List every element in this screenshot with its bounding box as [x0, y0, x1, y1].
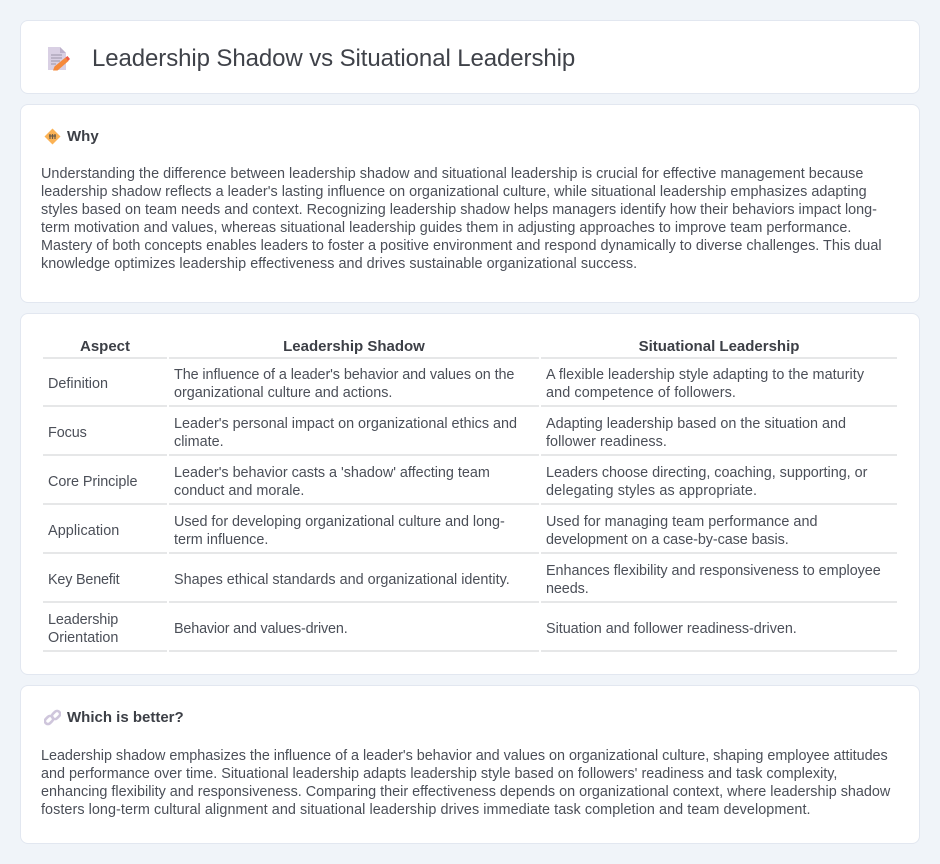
- row: core principle: conduct and morale.: [174, 483, 304, 499]
- row: focus: follower readiness.: [546, 434, 667, 450]
- row: core principle: Leader's behavior casts a 'shadow' affecting team: [174, 465, 490, 481]
- row: application: Used for developing organizational culture and long-: [174, 514, 505, 530]
- text block: which is better: fosters long-term cultural alignment and situational leadership drives immediate task completion and team development.: [41, 802, 811, 818]
- panel: which is better: [20, 685, 920, 844]
- row: leadership orientation: Leadership: [48, 612, 118, 628]
- icon: link: [44, 710, 61, 726]
- text block: which is better: and performance over time. Situational leadership adapts leadership style based on followers' readiness and task complexity,: [41, 766, 837, 782]
- row: application: Used for managing team performance and: [546, 514, 818, 530]
- row: core principle: [43, 465, 897, 505]
- row: definition: and competence of followers.: [546, 385, 736, 401]
- icon: warning diamond: [44, 128, 60, 144]
- row: leadership orientation: Situation and follower readiness-driven.: [546, 621, 797, 637]
- panel: why: [20, 104, 920, 303]
- row: application: Application: [48, 523, 119, 539]
- icon: memo with pencil: [48, 47, 70, 70]
- row: core principle: delegating styles as appropriate.: [546, 483, 757, 499]
- table header: Leadership Shadow: [283, 338, 425, 355]
- row: key benefit: Key Benefit: [48, 572, 119, 588]
- text block: why: knowledge optimizes leadership effectiveness and drives sustainable organizational success.: [41, 256, 637, 272]
- row: key benefit: [43, 563, 897, 603]
- heading: which is better: Which is better?: [67, 709, 184, 726]
- row: core principle: Core Principle: [48, 474, 137, 490]
- row: application: development on a case-by-case basis.: [546, 532, 789, 548]
- row: focus: Focus: [48, 425, 87, 441]
- row: focus: climate.: [174, 434, 224, 450]
- row: leadership orientation: Behavior and values-driven.: [174, 621, 348, 637]
- row: key benefit: needs.: [546, 581, 589, 597]
- text block: why: term motivation and values, whereas situational leadership guides them in adjusting approaches to improve team performance.: [41, 220, 851, 236]
- table header: Aspect: [80, 338, 130, 355]
- heading: why: Why: [67, 128, 99, 145]
- row: definition: Definition: [48, 376, 108, 392]
- table header: Situational Leadership: [639, 338, 799, 355]
- row: focus: [43, 416, 897, 456]
- row: application: term influence.: [174, 532, 268, 548]
- row: definition: [43, 367, 897, 407]
- row: leadership orientation: Orientation: [48, 630, 118, 646]
- row: definition: organizational culture and actions.: [174, 385, 392, 401]
- panel: comparison table: [20, 313, 920, 675]
- row: focus: Leader's personal impact on organizational ethics and: [174, 416, 517, 432]
- text block: why: [41, 166, 882, 272]
- text block: why: leadership shadow reflects a leader's lasting influence on organizational culture, while situational leadership emphasizes adapting: [41, 184, 867, 200]
- row: core principle: Leaders choose directing, coaching, supporting, or: [546, 465, 867, 481]
- title: Leadership Shadow vs Situational Leadership: [92, 45, 575, 72]
- row: key benefit: Shapes ethical standards and organizational identity.: [174, 572, 510, 588]
- text block: why: Mastery of both concepts enables leaders to foster a positive environment and respond dynamically to diverse challenges. This dual: [41, 238, 882, 254]
- panel: header: [20, 20, 920, 94]
- row: application: [43, 514, 897, 554]
- text block: why: Understanding the difference between leadership shadow and situational leadership is crucial for effective management because: [41, 166, 863, 182]
- row: leadership orientation: [43, 612, 897, 652]
- text block: why: styles based on team needs and context. Recognizing leadership shadow helps managers identify how their behaviors impact long-: [41, 202, 877, 218]
- row: focus: Adapting leadership based on the situation and: [546, 416, 846, 432]
- text block: which is better: Leadership shadow emphasizes the influence of a leader's behavior and values on organizational culture, shaping employee attitudes: [41, 748, 888, 764]
- text block: which is better: [41, 748, 890, 818]
- table header: [43, 338, 897, 359]
- text block: which is better: enhancing flexibility and responsiveness. Comparing their effectiveness depends on organizational context, where leadership shadow: [41, 784, 890, 800]
- row: definition: The influence of a leader's behavior and values on the: [174, 367, 514, 383]
- row: key benefit: Enhances flexibility and responsiveness to employee: [546, 563, 881, 579]
- row: definition: A flexible leadership style adapting to the maturity: [546, 367, 864, 383]
